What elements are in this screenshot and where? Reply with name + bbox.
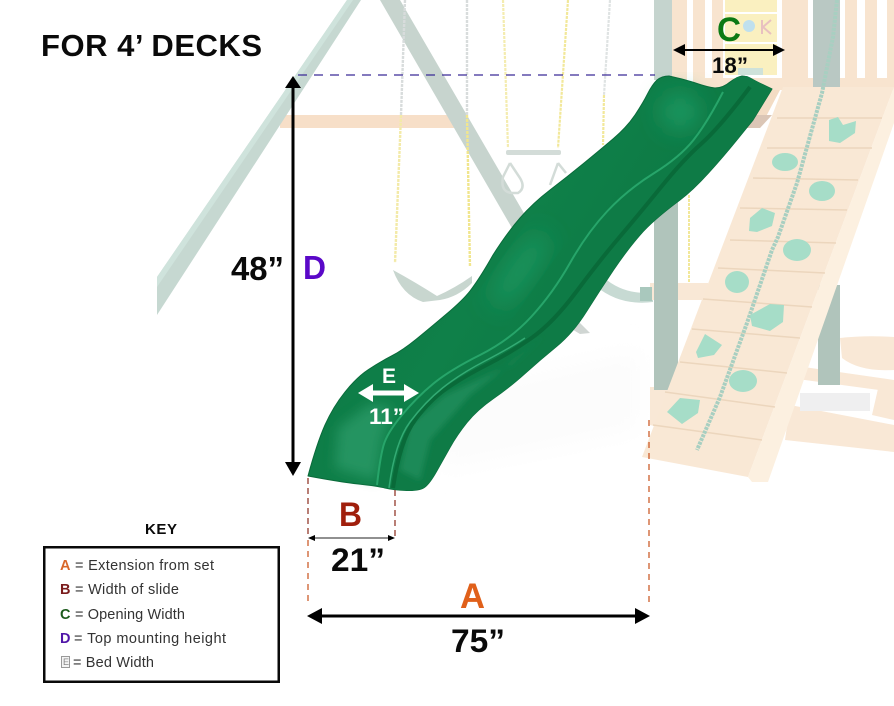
plank lines (653, 118, 882, 440)
75 inch label: 75” (451, 623, 505, 659)
slide side lip (377, 76, 772, 491)
title: FOR 4’ DECKS (41, 28, 262, 63)
18 inch label: 18” (712, 53, 748, 78)
lower frame foot (597, 277, 653, 303)
wood slats of deck (672, 0, 894, 90)
key row A: A (60, 558, 71, 574)
21 inch label: 21” (331, 542, 385, 578)
slide (308, 76, 772, 491)
climbing holds (667, 117, 856, 424)
slide body (308, 76, 772, 491)
platform beam behind wall (640, 283, 894, 452)
key heading: KEY (145, 521, 177, 538)
key row A: = Extension from set (75, 558, 214, 574)
climbing wall (642, 0, 894, 482)
activity panel (725, 0, 777, 75)
wooden cross beam (280, 115, 455, 128)
key row D: D (60, 631, 70, 647)
key panel (44, 547, 279, 682)
B letter: B (339, 496, 362, 534)
48 inch label: 48” (231, 250, 284, 287)
floor shadow (440, 350, 640, 470)
trapeze chains (503, 0, 610, 148)
11 inch label: 11” (369, 404, 404, 429)
key row C: C (60, 607, 71, 623)
slide bed highlights (335, 94, 698, 480)
deck posts (654, 0, 840, 390)
swing one seat (393, 270, 472, 302)
dimension D: height (231, 75, 655, 476)
trapeze bar and handles (502, 150, 566, 193)
key row C: = Opening Width (75, 607, 185, 623)
dimension B: slide width (308, 478, 395, 578)
round table (840, 336, 894, 370)
rope (697, 0, 837, 450)
key row B: = Width of slide (75, 582, 179, 598)
key row E: = Bed Width (73, 655, 154, 671)
yellow chain beside post (688, 195, 690, 282)
lower frame stub (570, 318, 590, 334)
C letter: C (717, 11, 741, 49)
right A-frame leg (380, 0, 525, 228)
dimension C: opening width (673, 11, 785, 78)
deck support under platform (700, 90, 780, 128)
key row D: = Top mounting height (74, 631, 226, 647)
sandbox shadow (800, 393, 870, 411)
dimension E: bed width (358, 365, 419, 429)
wall side rail (748, 87, 894, 482)
key row E: E (63, 657, 69, 667)
D letter: D (303, 249, 326, 286)
background: faded swing set (157, 0, 894, 482)
A letter: A (460, 577, 485, 616)
swing one chains (395, 0, 470, 267)
key row B: B (60, 582, 70, 598)
left A-frame leg (157, 0, 361, 315)
E letter: E (382, 365, 396, 388)
dimension A: extension from set (307, 420, 650, 659)
